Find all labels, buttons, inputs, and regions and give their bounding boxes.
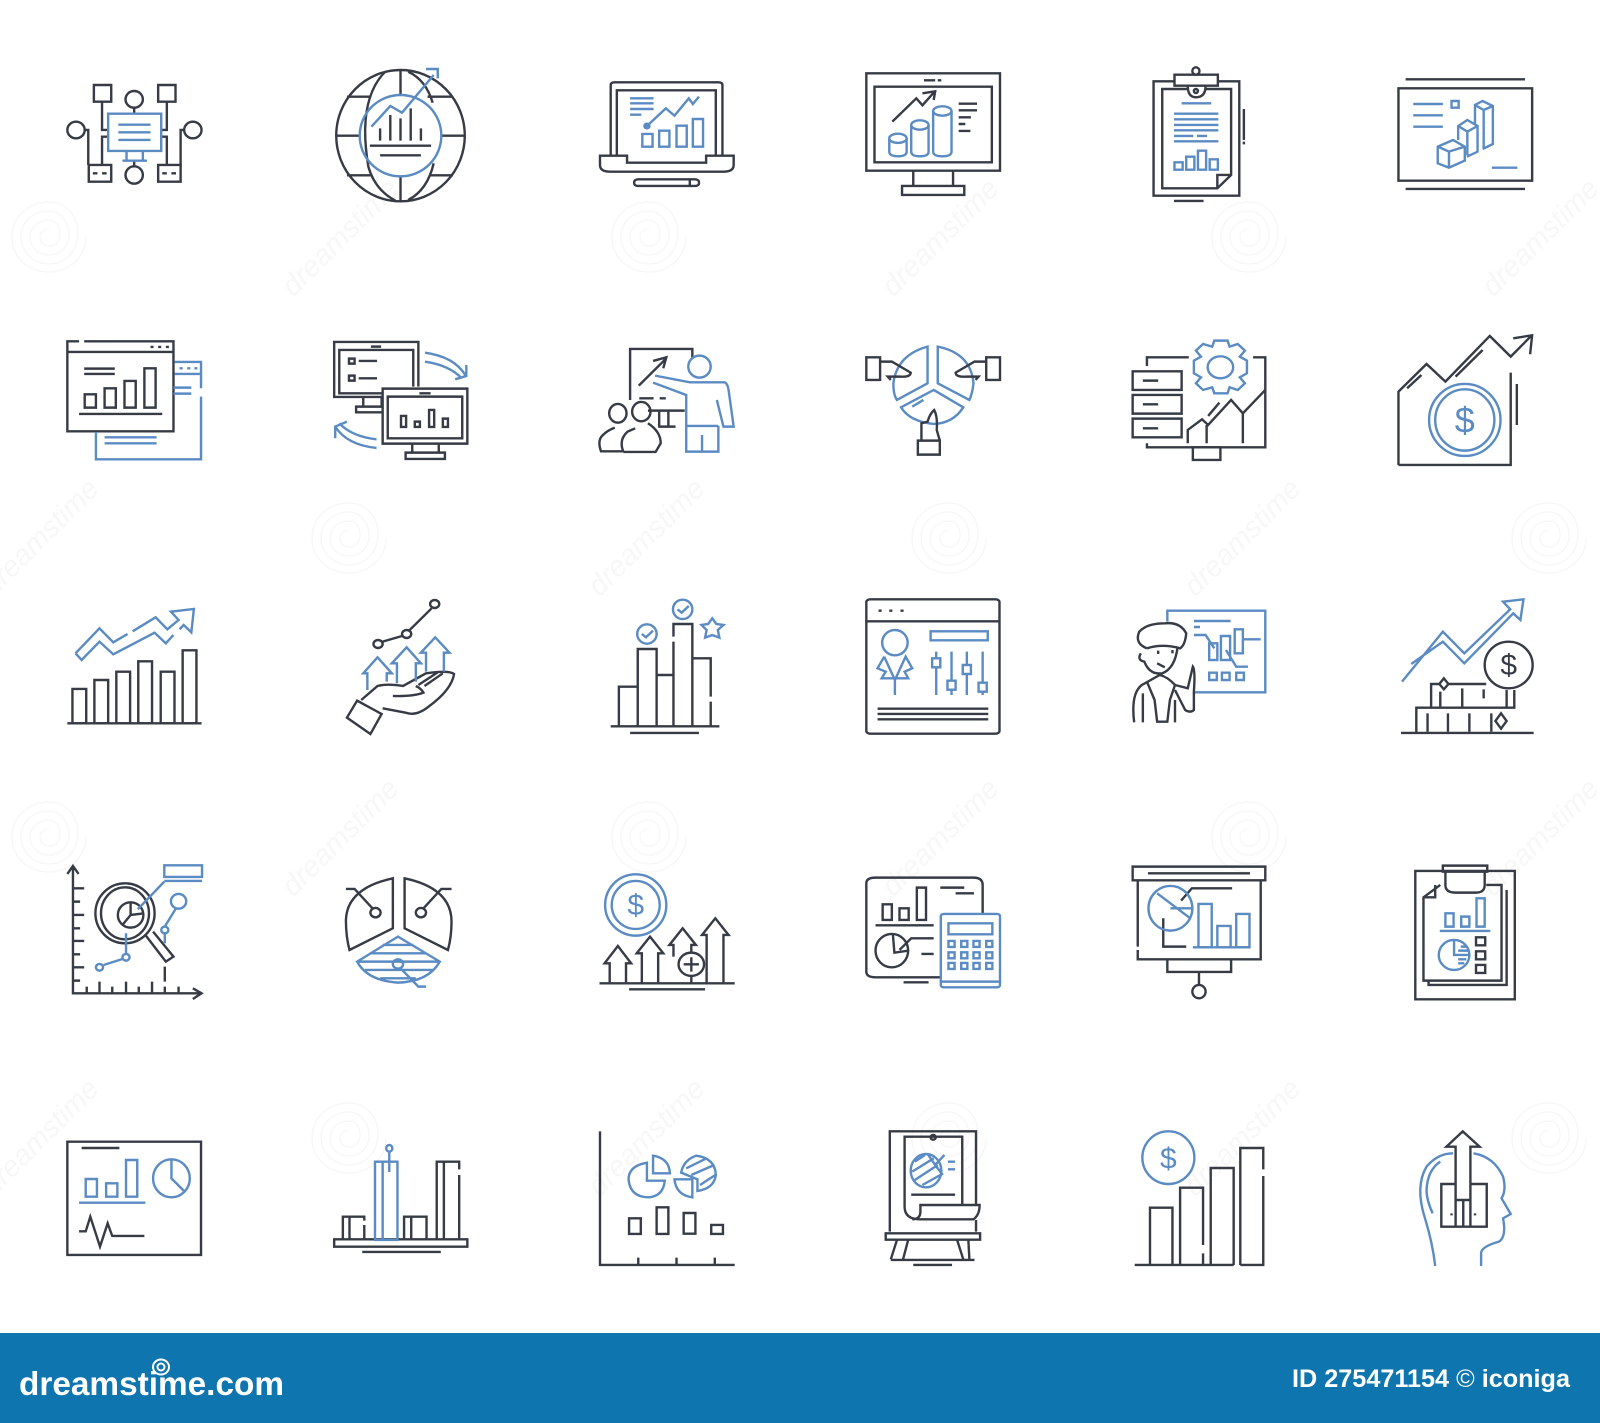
icon: dollar coin with arrows — [599, 874, 735, 989]
icon group: rows three and four, right half — [866, 599, 1534, 999]
icon: hand lifting arrows — [347, 600, 454, 734]
icon: axes with pies and bars — [600, 1131, 735, 1265]
icon: network diagram — [67, 85, 202, 184]
icon: bar chart with rising arrow — [67, 609, 202, 723]
text: dreamstime — [276, 173, 406, 303]
icon: flip chart on easel — [886, 1131, 980, 1265]
icon group: rows one and two, right half — [866, 67, 1532, 465]
icon: dollar with rising bars — [1135, 1131, 1263, 1265]
icon group: bottom row, left half — [67, 1131, 735, 1265]
icon: browser windows with bar chart — [67, 341, 201, 459]
text: dreamstime — [876, 173, 1006, 303]
icon: dollar coin under rising arrow — [1398, 335, 1532, 465]
icon: clipboard with charts — [1415, 866, 1515, 999]
icon: dollar coin under rising arrow: $ — [1455, 400, 1475, 441]
icon: coins with rising arrow — [1401, 599, 1534, 733]
icon: coins with rising arrow: $ — [1500, 649, 1517, 682]
icon: projector screen presentation — [1133, 867, 1265, 998]
icon: clipboard report — [1154, 67, 1244, 201]
icon: businessman beside chart board — [1133, 611, 1265, 722]
icon: segmented pie — [346, 878, 452, 987]
icon group: bottom row, right half — [886, 1131, 1511, 1266]
text: dreamstime — [1178, 1073, 1308, 1203]
icon: desktop monitor with cylinder chart — [866, 73, 1000, 195]
icon: dashboard window with sliders — [866, 599, 999, 734]
icon group: rows one and two, left half — [67, 69, 734, 459]
icon: laptop with chart — [600, 82, 734, 186]
icon: server stack with gear and chart — [1133, 341, 1265, 460]
icon: dashboard with bars, pie and pulse — [67, 1142, 201, 1255]
icon: globe with growth chart — [336, 69, 465, 201]
icon: presenter and audience — [599, 349, 734, 452]
icon: bars with checks and star — [611, 600, 723, 733]
icon group: rows three and four, left half — [67, 600, 735, 999]
dreamstime logo: dreamstime.com — [19, 1365, 284, 1402]
text: dreamstime — [582, 473, 712, 603]
icon: bars on a stand — [334, 1145, 467, 1252]
text: dreamstime — [582, 1073, 712, 1203]
icon: board with 3D bars — [1398, 79, 1532, 189]
icon: two monitors syncing — [334, 342, 467, 459]
image id and credit: ID 275471154 © iconiga — [1292, 1365, 1571, 1393]
footer banner — [0, 1333, 1600, 1423]
icon: report screen with calculator — [866, 878, 1000, 987]
icon: hands holding pie slices — [866, 347, 1000, 455]
icon: magnifier over chart — [67, 865, 202, 999]
icon: dollar coin with arrows: $ — [627, 889, 644, 922]
icon: dollar with rising bars: $ — [1160, 1142, 1177, 1175]
text: dreamstime — [876, 773, 1006, 903]
icon: head with upward arrow — [1420, 1131, 1511, 1266]
text: dreamstime — [276, 773, 406, 903]
text: dreamstime — [1178, 473, 1308, 603]
